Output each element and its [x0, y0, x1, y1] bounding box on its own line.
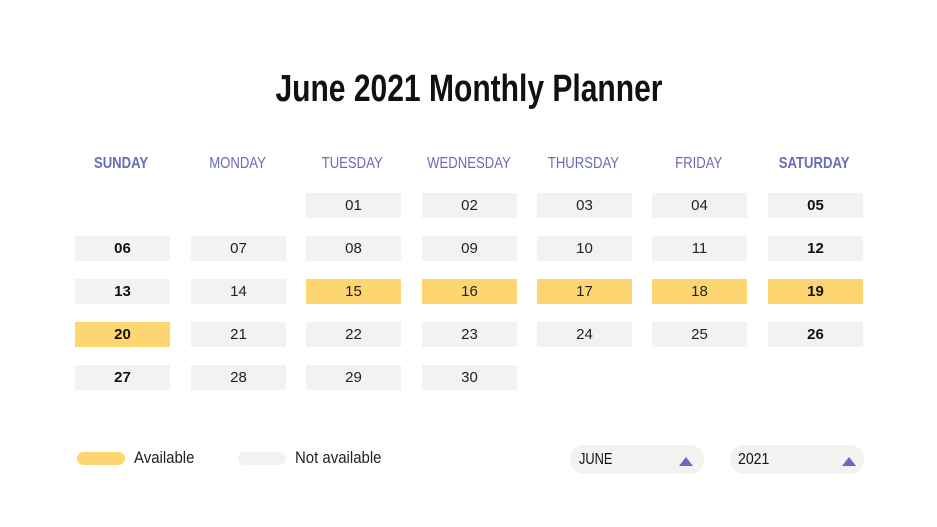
- dropdown: year: [730, 445, 864, 474]
- calendar grid: 04: [691, 197, 708, 214]
- title: June 2021 Monthly Planner: [275, 68, 662, 110]
- calendar grid: 13: [114, 283, 131, 300]
- day headers: SATURDAY: [779, 155, 850, 172]
- calendar grid: 09: [461, 240, 478, 257]
- calendar grid: 03: [576, 197, 593, 214]
- calendar grid: 12: [807, 240, 824, 257]
- calendar grid: 21: [230, 326, 247, 343]
- calendar grid: 07: [230, 240, 247, 257]
- calendar grid: 02: [461, 197, 478, 214]
- day headers: THURSDAY: [548, 155, 619, 172]
- calendar grid: 24: [576, 326, 593, 343]
- calendar grid: 26: [807, 326, 824, 343]
- calendar grid: 05: [807, 197, 824, 214]
- calendar grid: 29: [345, 369, 362, 386]
- calendar grid: 23: [461, 326, 478, 343]
- calendar grid: 08: [345, 240, 362, 257]
- day headers: TUESDAY: [322, 155, 383, 172]
- calendar grid: 28: [230, 369, 247, 386]
- dropdown: month: JUNE: [579, 451, 612, 468]
- legend: Available: [134, 448, 194, 467]
- legend: Not available: [295, 448, 381, 467]
- legend: [77, 448, 381, 467]
- calendar grid: 25: [691, 326, 708, 343]
- dropdown: year: 2021: [738, 451, 769, 468]
- day headers: FRIDAY: [675, 155, 722, 172]
- calendar grid: 14: [230, 283, 247, 300]
- calendar grid: 16: [461, 283, 478, 300]
- calendar grid: [75, 193, 863, 390]
- calendar grid: 30: [461, 369, 478, 386]
- calendar grid: 01: [345, 197, 362, 214]
- calendar grid: 19: [807, 283, 824, 300]
- dropdown: month: [570, 445, 704, 474]
- calendar grid: 15: [345, 283, 362, 300]
- calendar grid: 18: [691, 283, 708, 300]
- calendar grid: 10: [576, 240, 593, 257]
- calendar grid: 27: [114, 369, 131, 386]
- day headers: MONDAY: [209, 155, 266, 172]
- day headers: SUNDAY: [94, 155, 149, 172]
- calendar grid: 06: [114, 240, 131, 257]
- day headers: WEDNESDAY: [427, 155, 510, 172]
- calendar grid: 11: [692, 240, 707, 257]
- calendar grid: 22: [345, 326, 362, 343]
- day headers: [94, 155, 850, 172]
- calendar grid: 20: [114, 326, 131, 343]
- calendar grid: 17: [576, 283, 593, 300]
